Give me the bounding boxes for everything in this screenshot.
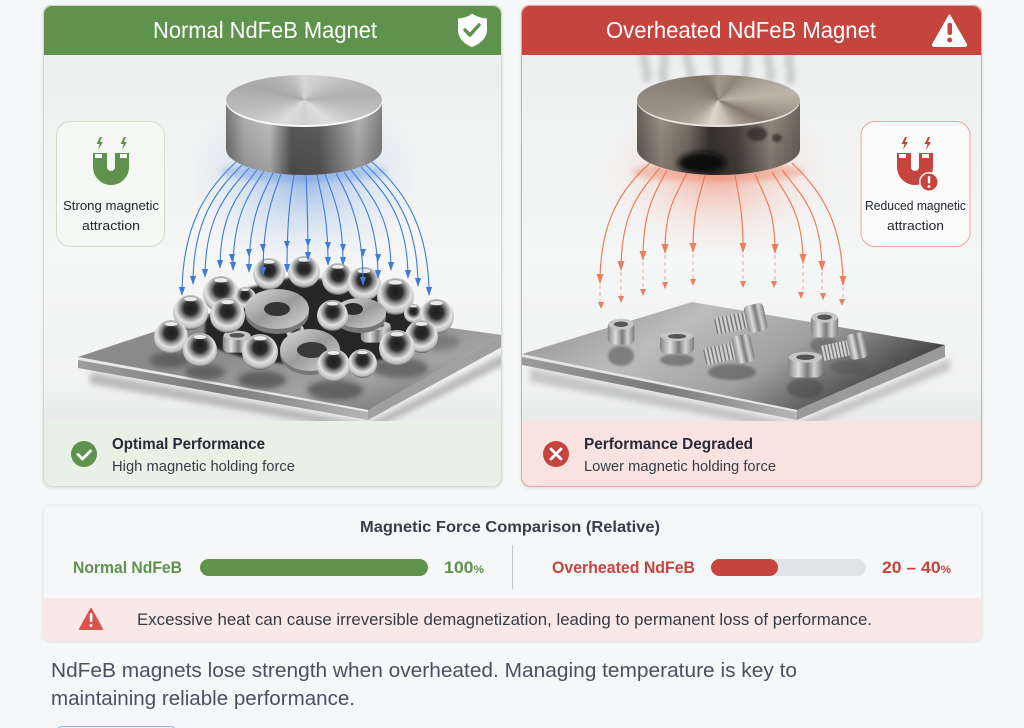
washers [245, 289, 386, 375]
callout: strong magnetic attraction: attraction [82, 218, 140, 233]
header: normal [43, 5, 502, 55]
cropped button outline [56, 726, 177, 728]
bar: overheated NdFeB [552, 559, 951, 577]
summary text [51, 659, 797, 710]
comparison title: Magnetic Force Comparison (Relative) [360, 519, 660, 536]
panel: normal NdFeB magnet [43, 5, 510, 487]
status band: performance degraded: Lower magnetic holding force [584, 458, 776, 475]
callout: strong magnetic attraction [56, 122, 164, 246]
callout: reduced magnetic attraction [861, 122, 970, 246]
magnetic field lines: weakened orange [596, 149, 846, 309]
magnet: discoloured heat-damaged disc [632, 75, 804, 182]
status band: performance degraded: Performance Degraded [584, 436, 753, 453]
callout: reduced magnetic attraction: attraction [887, 218, 944, 233]
callout: strong magnetic attraction: Strong magnetic [63, 198, 159, 213]
status band: optimal performance [43, 421, 502, 487]
summary text: NdFeB magnets lose strength when overheated. Managing temperature is key to [51, 659, 797, 682]
header: overheated: Overheated NdFeB Magnet [606, 17, 877, 43]
status band: performance degraded [521, 421, 982, 487]
warning strip: Excessive heat can cause irreversible demagnetization, leading to permanent loss of performance. [137, 611, 872, 629]
bar: overheated NdFeB: 20 – 40 % [882, 559, 951, 577]
callout: reduced magnetic attraction: Reduced magnetic [865, 198, 966, 213]
panel: overheated NdFeB magnet [521, 5, 982, 487]
magnet: clean silver disc [220, 75, 388, 182]
smoke above magnet [644, 52, 791, 84]
bar: normal NdFeB: 100% [444, 559, 484, 577]
icon: red cross [543, 441, 569, 467]
plate with collected metal parts [78, 256, 510, 432]
summary text: maintaining reliable performance. [51, 687, 355, 710]
bar: normal NdFeB: Normal NdFeB [73, 559, 182, 577]
icon: red horseshoe magnet with alert [899, 137, 939, 192]
icon: warning triangle [933, 16, 966, 46]
plate with few bolts [522, 302, 950, 432]
icon: shield check [458, 14, 487, 47]
status band: optimal performance: High magnetic holding force [112, 458, 295, 475]
icon: green horseshoe magnet [95, 137, 127, 178]
warning strip [43, 598, 982, 641]
icon: green check [71, 441, 97, 467]
magnetic field lines: strong blue [178, 138, 432, 296]
panel: magnetic force comparison [43, 505, 982, 641]
bar: overheated NdFeB: Overheated NdFeB [552, 559, 695, 577]
status band: optimal performance: Optimal Performance [112, 436, 265, 453]
header: overheated [521, 5, 982, 55]
header: normal: Normal NdFeB Magnet [153, 17, 378, 43]
bar: normal NdFeB [73, 559, 484, 577]
icon: small warning triangle [80, 609, 102, 629]
